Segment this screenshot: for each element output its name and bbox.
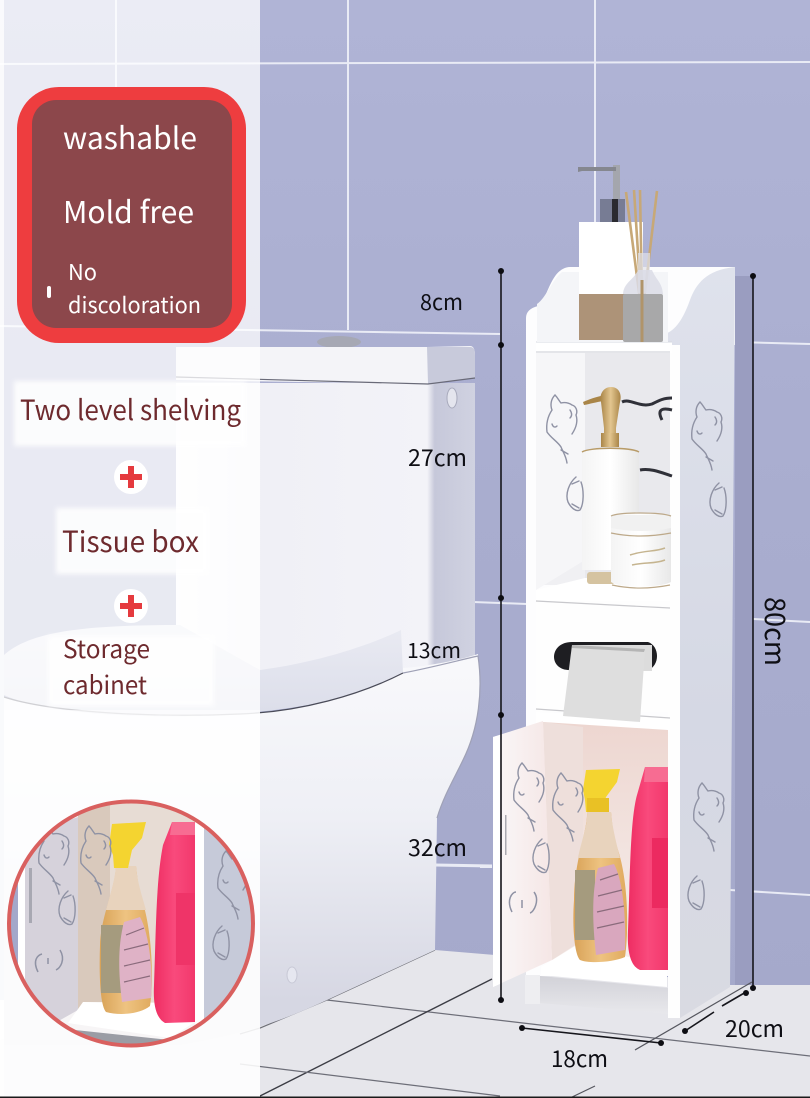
inset pink bottle xyxy=(154,822,195,1023)
door xyxy=(493,721,552,987)
feature: no discoloration: discoloration xyxy=(68,288,201,320)
bear cut-outs xyxy=(509,395,726,913)
storage compartment xyxy=(541,722,668,987)
inner back wall xyxy=(78,805,110,1009)
label: storage cabinet: cabinet xyxy=(63,666,148,702)
dimension labels xyxy=(407,285,796,1074)
cabinet side panel xyxy=(661,267,735,1018)
inset side panel xyxy=(195,822,204,1024)
cabinet under-shelf and legs xyxy=(525,975,668,1014)
inset ring xyxy=(9,802,253,1046)
tissue xyxy=(563,645,645,722)
label: tissue box: Tissue box xyxy=(62,519,199,561)
plus icon 1 xyxy=(114,460,148,494)
label plates xyxy=(14,381,246,706)
feature: mold free: Mold free xyxy=(63,188,194,232)
drawer xyxy=(536,601,670,722)
inset shelf xyxy=(68,1002,195,1038)
wall cut-outs xyxy=(622,398,672,476)
top shelf soap bottle xyxy=(578,165,643,340)
dimension labels: 80cm xyxy=(756,597,796,666)
cream jar xyxy=(611,513,671,588)
dimension lines xyxy=(498,268,756,1046)
inset: storage compartment close-up xyxy=(0,795,260,1055)
inset spray bottle xyxy=(100,822,152,1014)
dimension labels: 18cm xyxy=(551,1040,608,1074)
top shelf xyxy=(536,342,672,353)
dimension labels: 20cm xyxy=(725,1010,784,1044)
cistern button xyxy=(317,336,361,348)
feature: washable: washable xyxy=(63,114,197,158)
shelf above storage xyxy=(536,712,670,732)
reed diffuser xyxy=(623,190,663,342)
spray bottle xyxy=(573,769,627,962)
cabinet front frame and top rail xyxy=(526,267,735,976)
white left column overlay xyxy=(0,0,260,1098)
cabinet xyxy=(493,165,735,1018)
label: two level shelving: Two level shelving xyxy=(20,389,241,429)
dimension labels: 13cm xyxy=(407,635,461,665)
panel: features badge xyxy=(17,87,246,343)
dimension labels: 32cm xyxy=(408,829,467,863)
toilet xyxy=(4,336,480,1045)
floor xyxy=(0,950,810,1098)
label: storage cabinet: Storage xyxy=(63,630,150,666)
inset door xyxy=(25,817,78,1040)
tissue slot xyxy=(554,642,657,670)
feature: no discoloration xyxy=(47,255,201,320)
pink bottle xyxy=(628,767,668,970)
label: storage cabinet xyxy=(63,630,150,702)
gold pump bottle xyxy=(582,387,639,584)
feature: no discoloration: No xyxy=(68,255,97,287)
middle compartment xyxy=(536,352,672,605)
dimension labels: 27cm xyxy=(408,439,467,473)
plus icon 2 xyxy=(114,589,148,623)
bottom edge line xyxy=(0,1096,810,1098)
dimension labels: 8cm xyxy=(420,285,463,317)
